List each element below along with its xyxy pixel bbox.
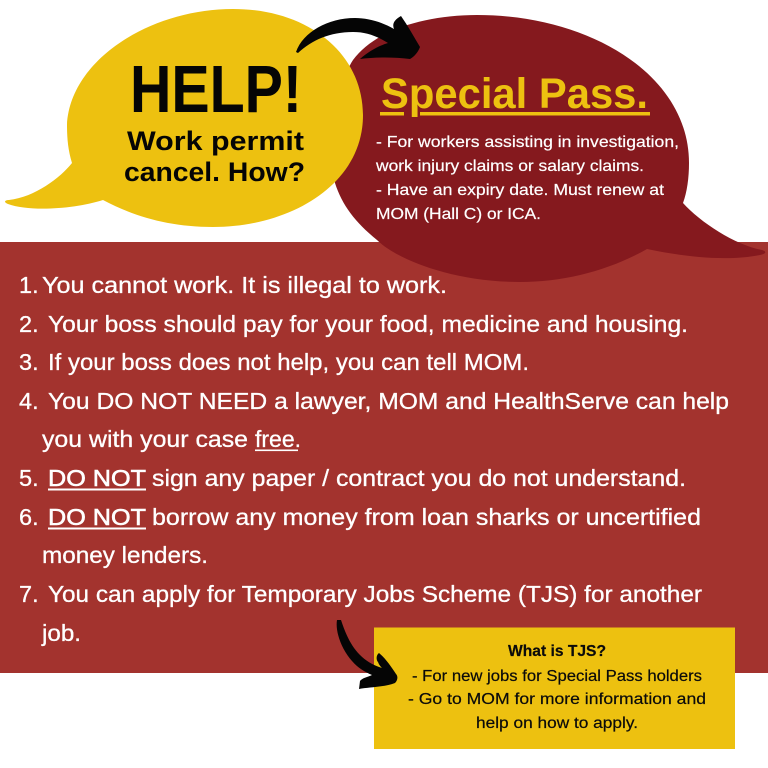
list: seven numbered points: 3.: [19, 349, 39, 375]
callout: What is TJS: What is TJS?: [508, 643, 606, 660]
text: work permit question: Work permit: [127, 126, 304, 156]
icon: dark red speech bubble: [332, 15, 765, 282]
list: seven numbered points: money lenders.: [42, 542, 208, 568]
text: Special Pass details: work injury claims or salary claims.: [375, 158, 644, 175]
text: work permit question: [124, 126, 305, 187]
list: seven numbered points: DO NOT: [48, 465, 146, 491]
callout: What is TJS: [374, 628, 735, 749]
list: seven numbered points: you with your case: [42, 426, 248, 452]
list: seven numbered points: 2.: [19, 311, 39, 337]
list: seven numbered points: 6.: [19, 504, 39, 530]
text: Special Pass details: - Have an expiry date. Must renew at: [376, 182, 665, 199]
list: seven numbered points: job.: [41, 620, 81, 646]
list: seven numbered points: 1.: [19, 272, 39, 298]
list: seven numbered points: [19, 272, 729, 646]
panel: main red background: [0, 242, 768, 673]
arrow: bottom curved arrow: [337, 620, 397, 689]
list: seven numbered points: You can apply for Temporary Jobs Scheme (TJS) for another: [48, 581, 702, 607]
list: seven numbered points: 5.: [19, 465, 39, 491]
list: seven numbered points: If your boss does not help, you can tell MOM.: [48, 349, 529, 375]
list: seven numbered points: borrow any money from loan sharks or uncertified: [152, 504, 701, 530]
heading: HELP!: HELP!: [130, 52, 302, 127]
list: seven numbered points: Your boss should pay for your food, medicine and housing.: [48, 311, 688, 337]
callout: What is TJS: - Go to MOM for more information and: [408, 691, 706, 708]
heading: Special Pass: Special Pass.: [381, 70, 648, 118]
list: seven numbered points: sign any paper / contract you do not understand.: [152, 465, 686, 491]
list: seven numbered points: You DO NOT NEED a lawyer, MOM and HealthServe can help: [48, 388, 729, 414]
list: seven numbered points: 7.: [19, 581, 39, 607]
text: Special Pass details: - For workers assisting in investigation,: [376, 134, 679, 151]
icon: yellow speech bubble: [5, 9, 363, 227]
callout: What is TJS: - For new jobs for Special Pass holders: [412, 668, 702, 685]
list: seven numbered points: free.: [255, 426, 301, 452]
arrow: top curved arrow: [296, 16, 420, 59]
list: seven numbered points: DO NOT: [48, 504, 146, 530]
text: Special Pass details: [375, 134, 679, 223]
list: seven numbered points: 4.: [19, 388, 39, 414]
callout: What is TJS: help on how to apply.: [476, 715, 638, 732]
text: Special Pass details: MOM (Hall C) or ICA.: [376, 206, 541, 223]
text: work permit question: cancel. How?: [124, 157, 305, 187]
list: seven numbered points: You cannot work. It is illegal to work.: [42, 272, 447, 298]
